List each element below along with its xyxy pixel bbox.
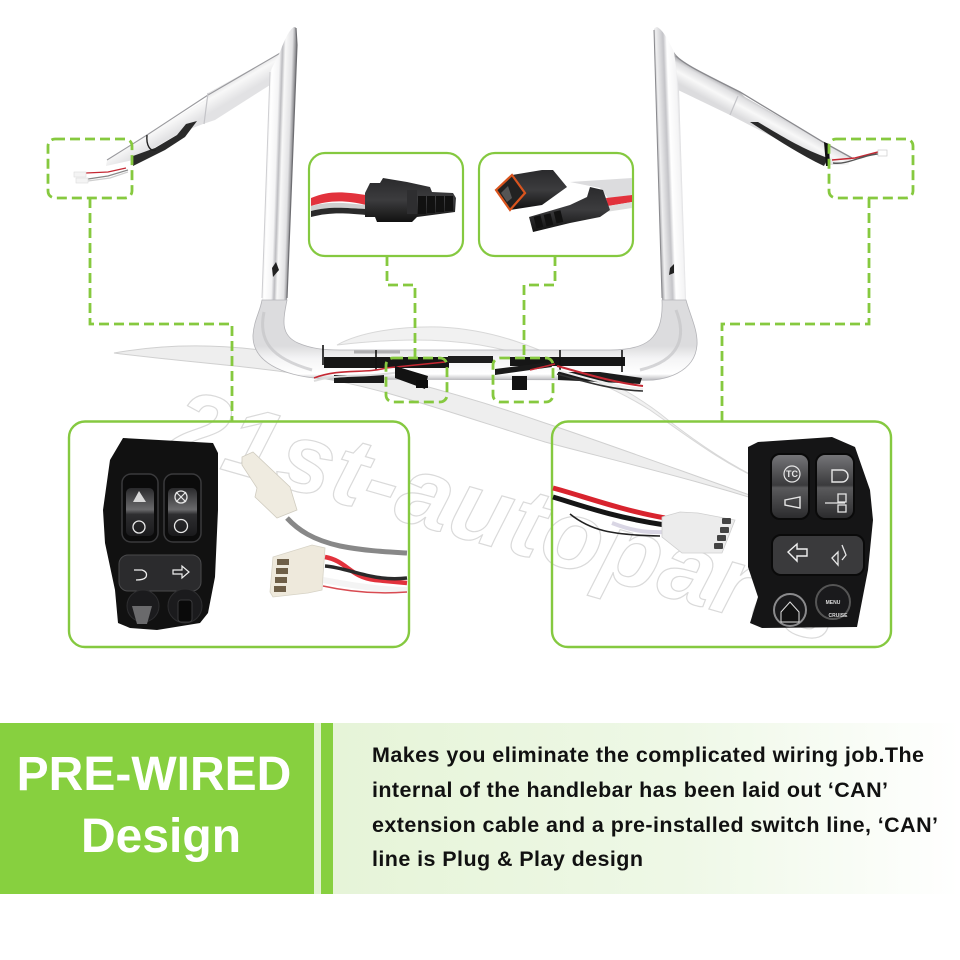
description text: line is Plug & Play design <box>372 847 643 871</box>
right switch housing: TC <box>786 469 798 479</box>
footer band <box>0 723 960 894</box>
description text <box>333 723 960 894</box>
watermark: swoosh and 21st-autoparts: 21st-autoparts <box>157 367 855 664</box>
left switch housing <box>103 438 218 630</box>
handlebar: centre bar <box>253 300 697 391</box>
right switch housing: CRUISE <box>829 613 848 619</box>
heading block: Design <box>81 810 241 863</box>
heading block <box>0 723 314 894</box>
callout: right end wire connector box <box>829 139 913 198</box>
callout: centre-right connector box <box>493 358 553 402</box>
right switch housing <box>748 437 873 628</box>
right wires and connector <box>553 488 735 553</box>
description text: Makes you eliminate the complicated wiring job.The <box>372 743 924 767</box>
panel: right switch and connector <box>552 422 891 647</box>
left white connector plug with grey cable <box>242 452 407 553</box>
left white 8-pin connector with wires <box>270 545 407 597</box>
handlebar: left arm <box>106 27 297 300</box>
panel: left switch and connectors <box>69 422 409 647</box>
handlebar: right arm <box>654 27 887 300</box>
right switch housing: MENU <box>826 600 841 606</box>
panel: black 4-pin connector <box>309 153 463 256</box>
panel: paired connectors <box>479 153 633 256</box>
dashed connector lines <box>90 198 869 421</box>
description text: internal of the handlebar has been laid out ‘CAN’ <box>372 778 888 802</box>
heading block: PRE-WIRED <box>17 748 291 801</box>
description text: extension cable and a pre-installed switch line, ‘CAN’ <box>372 813 938 837</box>
callout: centre-left connector box <box>386 358 447 402</box>
callout: left end wire connector box <box>48 139 132 198</box>
